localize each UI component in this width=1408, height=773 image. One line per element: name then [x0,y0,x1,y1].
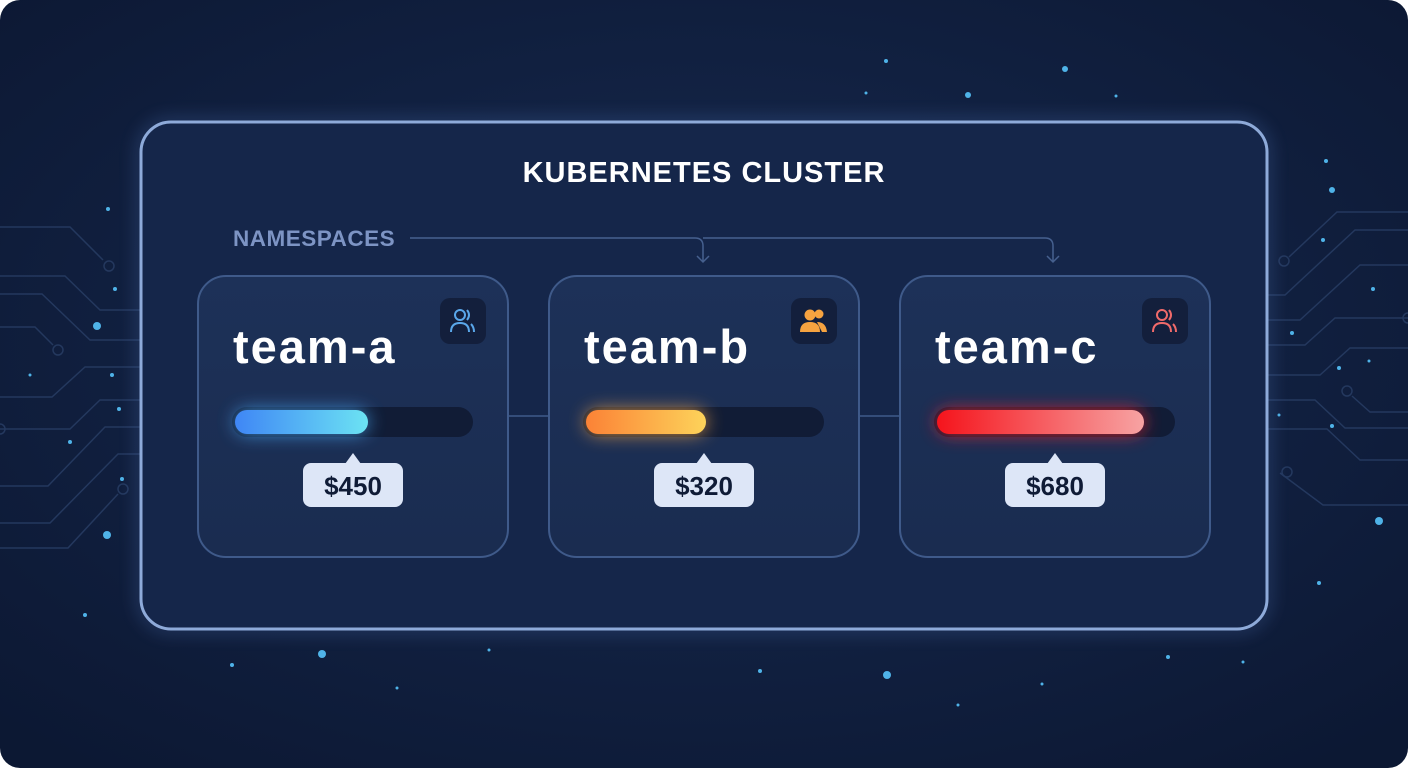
price $320: $320 [675,471,733,501]
cluster panel [141,122,1267,629]
bar team-c [934,407,1175,437]
bar team-a [232,407,473,437]
price $320 [654,453,754,507]
card: team-b [549,276,859,557]
circuit pattern left [0,227,140,548]
card: team-a [198,276,508,557]
card: team-a: team-a [233,320,397,373]
price $450 [303,453,403,507]
card: team-b: team-b [584,320,750,373]
card: team-c [900,276,1210,557]
icon: users orange [791,298,837,344]
circuit pattern right [1268,212,1408,505]
icon: users blue [440,298,486,344]
card connectors [508,415,900,417]
title: KUBERNETES CLUSTER [523,157,885,189]
price $680 [1005,453,1105,507]
price $450: $450 [324,471,382,501]
namespace arrows [410,238,1059,262]
icon: users red [1142,298,1188,344]
namespaces label: NAMESPACES [233,226,395,251]
price $680: $680 [1026,471,1084,501]
bar team-b [583,407,824,437]
card: team-c: team-c [935,320,1099,373]
